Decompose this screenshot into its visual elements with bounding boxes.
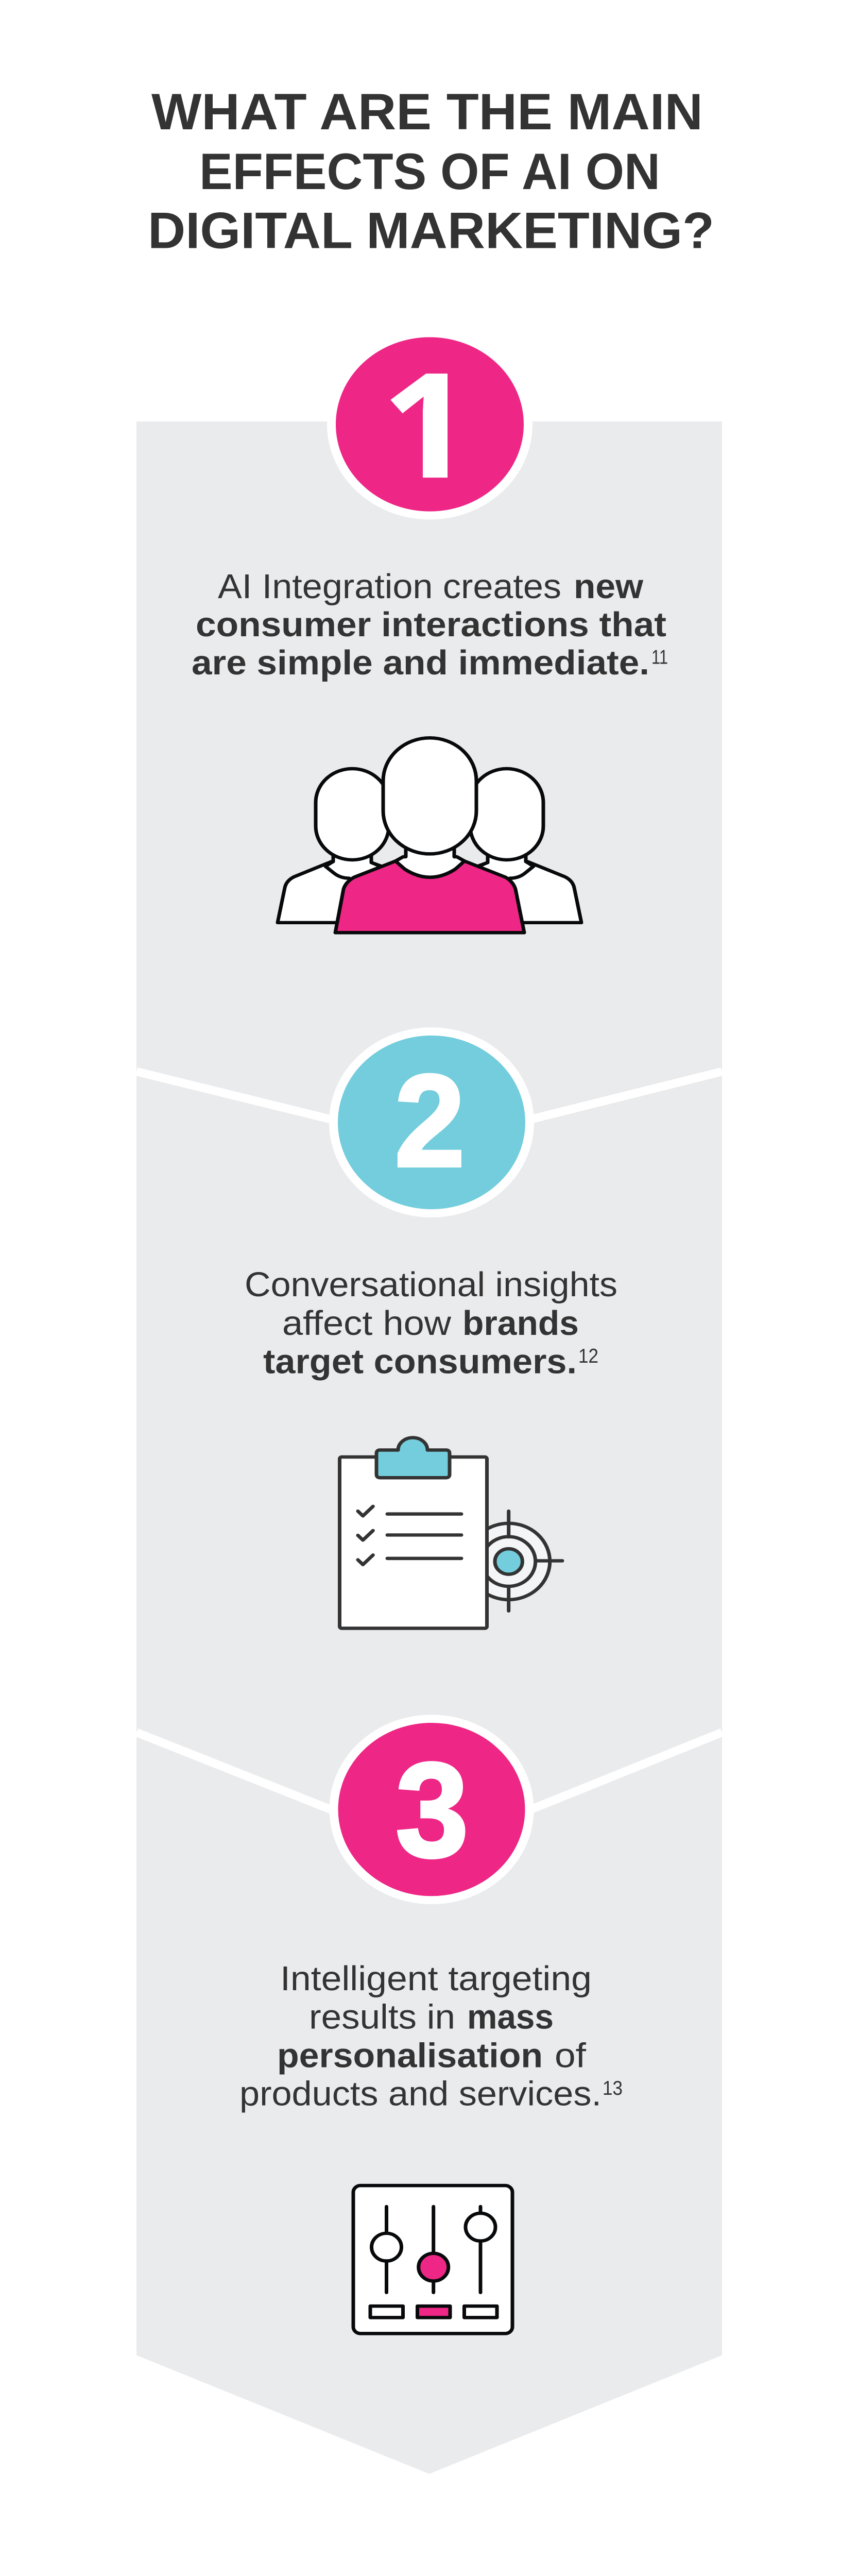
step 1 text bbox=[192, 567, 668, 682]
step 2 text: 12 bbox=[578, 1344, 598, 1367]
slider knob left bbox=[372, 2233, 402, 2261]
title bbox=[148, 83, 714, 259]
step 1 text: 11 bbox=[651, 646, 668, 668]
slider tracks bbox=[386, 2207, 480, 2293]
step 1 text: AI Integration creates bbox=[218, 567, 561, 605]
step 3 text: of bbox=[555, 2036, 587, 2075]
step 2 text: target consumers. bbox=[263, 1342, 577, 1381]
step 3 badge: 3 bbox=[396, 1735, 469, 1885]
left person head bbox=[316, 769, 389, 860]
title: WHAT ARE THE MAIN bbox=[151, 83, 703, 140]
divider between steps 2 and 3 bbox=[136, 1733, 722, 1850]
indicator left bbox=[370, 2306, 403, 2317]
icon: group of people bbox=[278, 738, 581, 933]
panel: grey arrow background bbox=[136, 421, 722, 2474]
title: EFFECTS OF AI ON bbox=[199, 143, 660, 200]
checklist bbox=[358, 1506, 461, 1565]
icon: clipboard with target bbox=[340, 1437, 562, 1629]
centre person shirt bbox=[335, 861, 524, 933]
slider knob middle bbox=[419, 2253, 449, 2281]
step 2 text: brands bbox=[462, 1304, 579, 1343]
step 2 text: Conversational insights bbox=[245, 1265, 617, 1304]
step 2 text bbox=[245, 1265, 617, 1381]
icon: sliders panel bbox=[353, 2185, 512, 2333]
step 3 text: Intelligent targeting bbox=[280, 1959, 592, 1998]
step 1 text: new bbox=[574, 567, 644, 605]
step 1 badge: 1 bbox=[385, 345, 455, 507]
panel frame bbox=[353, 2185, 512, 2333]
left person body bbox=[278, 852, 391, 923]
step 2 text: affect how bbox=[282, 1304, 452, 1343]
clipboard sheet bbox=[340, 1457, 487, 1629]
step 1 badge bbox=[332, 333, 528, 516]
title: DIGITAL MARKETING? bbox=[148, 202, 714, 259]
step 3 text: products and services. bbox=[239, 2074, 602, 2113]
step 3 text bbox=[239, 1959, 623, 2113]
step 3 badge bbox=[334, 1719, 529, 1900]
step 2 badge: 2 bbox=[394, 1048, 465, 1194]
clipboard clip bbox=[376, 1437, 450, 1478]
centre person head bbox=[383, 738, 476, 854]
right person head bbox=[470, 769, 543, 860]
slider knob right bbox=[466, 2213, 495, 2241]
step 3 text: mass bbox=[467, 1997, 554, 2036]
step 1 text: are simple and immediate. bbox=[192, 643, 649, 682]
step 3 text: results in bbox=[309, 1997, 455, 2036]
step 3 text: personalisation bbox=[277, 2036, 543, 2075]
step 2 badge bbox=[334, 1031, 529, 1213]
indicator right bbox=[465, 2306, 497, 2317]
centre person neck bbox=[396, 848, 465, 877]
indicator middle bbox=[417, 2306, 450, 2317]
step 3 text: 13 bbox=[603, 2077, 623, 2099]
divider between steps 1 and 2 bbox=[136, 1072, 722, 1144]
right person body bbox=[468, 852, 581, 923]
target rings bbox=[468, 1511, 562, 1611]
step 1 text: consumer interactions that bbox=[196, 605, 666, 643]
